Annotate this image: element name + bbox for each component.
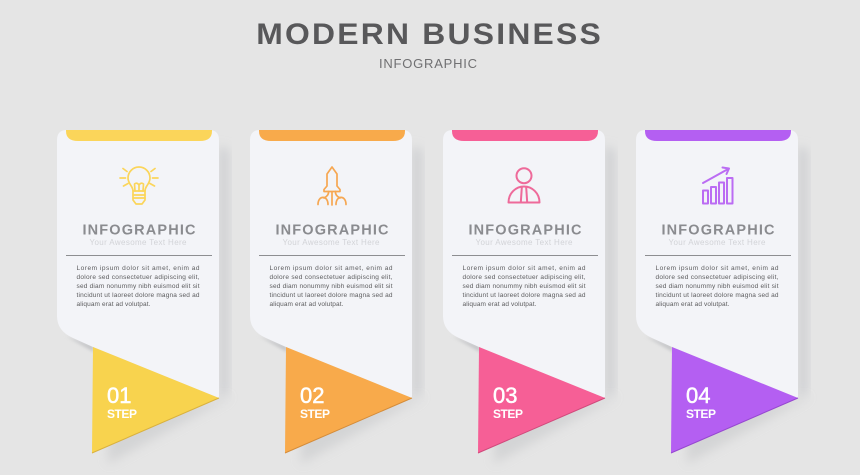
card shadow (452, 146, 618, 464)
icon: person (508, 168, 540, 202)
body text (656, 265, 779, 308)
card body (250, 130, 412, 398)
triangle (671, 347, 798, 453)
step label: STEP (300, 407, 330, 421)
tagline: Your Awesome Text Here (476, 238, 573, 247)
colour tab (66, 130, 212, 141)
card body (443, 130, 605, 398)
divider line (645, 255, 791, 256)
body text (462, 265, 586, 308)
card edge (604, 140, 606, 396)
step label: STEP (107, 407, 137, 421)
panel: step 1 (57, 130, 232, 464)
card edge (410, 140, 412, 396)
panel: step 3 (443, 130, 618, 464)
subtitle: INFOGRAPHIC (379, 56, 477, 71)
panel: step 4 (636, 130, 811, 464)
title: MODERN BUSINESS (256, 17, 601, 51)
card edge (796, 140, 798, 396)
triangle edge (285, 398, 412, 453)
triangle edge (92, 398, 219, 453)
body text (270, 265, 393, 308)
colour tab (645, 130, 791, 141)
step number: 04 (686, 383, 710, 408)
divider line (259, 255, 405, 256)
heading: INFOGRAPHIC (468, 222, 582, 238)
heading: INFOGRAPHIC (82, 222, 196, 238)
icon: light bulb (120, 167, 158, 204)
card shadow (66, 146, 232, 464)
divider line (66, 255, 212, 256)
panel: step 2 (250, 130, 425, 464)
card shadow (645, 146, 811, 464)
step number: 02 (300, 383, 324, 408)
triangle (92, 347, 219, 453)
colour tab (259, 130, 405, 141)
heading: INFOGRAPHIC (276, 222, 389, 238)
triangle edge (671, 398, 798, 453)
body text (76, 265, 200, 308)
triangle (285, 347, 412, 453)
card body (57, 130, 219, 398)
tagline: Your Awesome Text Here (90, 238, 187, 247)
step number: 01 (107, 383, 131, 408)
icon: growth chart (703, 168, 732, 204)
triangle edge (478, 398, 605, 453)
triangle (478, 347, 605, 453)
card shadow (259, 146, 425, 464)
step label: STEP (493, 407, 523, 421)
heading: INFOGRAPHIC (662, 222, 775, 238)
colour tab (452, 130, 598, 141)
step number: 03 (493, 383, 517, 408)
tagline: Your Awesome Text Here (668, 238, 766, 247)
divider line (452, 255, 598, 256)
step label: STEP (686, 407, 716, 421)
card body (636, 130, 798, 398)
icon: rocket (318, 167, 346, 205)
card edge (218, 140, 220, 396)
tagline: Your Awesome Text Here (282, 238, 380, 247)
